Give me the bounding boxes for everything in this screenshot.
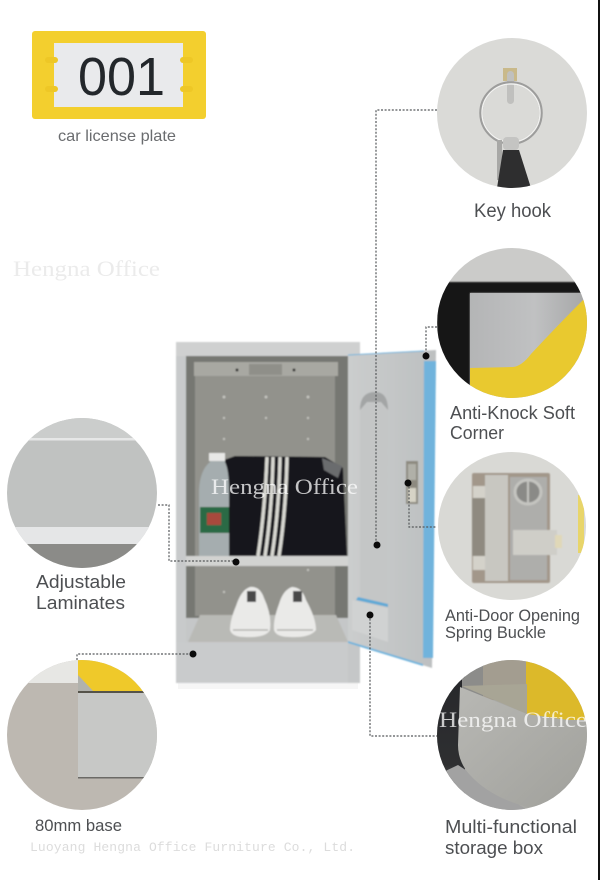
floor xyxy=(446,765,525,810)
plinth block xyxy=(78,693,158,778)
key fob xyxy=(503,137,519,150)
white sneakers xyxy=(230,587,316,637)
box inner xyxy=(462,684,527,714)
box front xyxy=(458,687,590,807)
open door xyxy=(348,350,436,668)
upper vent bracket xyxy=(194,362,338,376)
hook xyxy=(503,68,517,81)
locker body xyxy=(176,342,360,683)
label: adjustable laminates: Laminates xyxy=(36,592,125,613)
interior xyxy=(186,356,348,618)
label: key hook: Key hook xyxy=(474,201,551,222)
label: spring buckle: Anti-Door Opening xyxy=(445,607,580,625)
black duffel bag xyxy=(224,456,347,556)
white number card xyxy=(54,43,183,107)
left hinges xyxy=(180,385,184,399)
yellow sliver xyxy=(578,495,584,553)
black lower wedge xyxy=(470,385,471,386)
door blue edge xyxy=(423,361,436,658)
label: 80mm base: 80mm base xyxy=(35,817,122,835)
door recess xyxy=(360,392,388,603)
locker xyxy=(176,342,436,689)
peg holes xyxy=(222,396,310,593)
shelf xyxy=(186,556,348,566)
bag stripes xyxy=(258,457,287,556)
door inner face xyxy=(348,350,436,668)
door top blue edge xyxy=(348,350,424,356)
plate number: 001 xyxy=(78,47,165,107)
yellow top xyxy=(78,660,144,693)
license plate panel xyxy=(32,31,206,119)
label: adjustable laminates: Adjustable xyxy=(36,571,126,592)
yellow back xyxy=(526,660,588,720)
circle: soft corner xyxy=(437,248,590,400)
side frame left xyxy=(176,356,186,642)
shelf edge xyxy=(16,527,148,544)
faint watermark: Hengna Office xyxy=(13,256,160,281)
label: storage box: storage box xyxy=(445,837,544,858)
watermark on storage box: Hengna Office xyxy=(439,707,587,732)
latch bolt xyxy=(513,530,557,555)
right edge line xyxy=(598,0,600,880)
key ring xyxy=(481,83,541,143)
locker shadow xyxy=(178,683,358,689)
label: soft corner: Anti-Knock Soft xyxy=(450,403,575,423)
lower compartment floor xyxy=(188,615,348,642)
dark side xyxy=(437,676,465,794)
door lock xyxy=(406,461,418,504)
circle: key hook xyxy=(437,38,587,188)
plate clips xyxy=(45,57,193,92)
back panel shading xyxy=(195,376,335,616)
plate caption: car license plate xyxy=(58,128,176,145)
black frame xyxy=(437,281,581,385)
door blue bottom edge xyxy=(348,641,423,666)
anchor dots xyxy=(190,352,430,658)
circle: adjustable laminates xyxy=(7,418,157,569)
key blade xyxy=(497,140,502,180)
yellow plate frame xyxy=(32,31,206,119)
plinth base xyxy=(176,642,348,683)
top rail xyxy=(176,342,360,356)
watermark on locker: Hengna Office xyxy=(211,474,358,499)
circle: 80mm base xyxy=(7,658,158,810)
round spring xyxy=(515,480,541,504)
footer watermark: Luoyang Hengna Office Furniture Co., Ltd. xyxy=(30,840,355,855)
yellow corner xyxy=(470,300,590,398)
shadow below shelf xyxy=(27,544,137,568)
storage box on door xyxy=(352,600,388,642)
label: spring buckle: Spring Buckle xyxy=(445,624,546,642)
circle: spring buckle xyxy=(438,452,586,600)
circle: storage box xyxy=(437,660,590,810)
latch housing xyxy=(472,473,562,583)
leader lines xyxy=(77,110,437,736)
label: storage box: Multi-functional xyxy=(445,816,577,837)
grey corner xyxy=(470,293,587,398)
label: soft corner: Corner xyxy=(450,423,504,443)
water bottle xyxy=(199,453,229,556)
